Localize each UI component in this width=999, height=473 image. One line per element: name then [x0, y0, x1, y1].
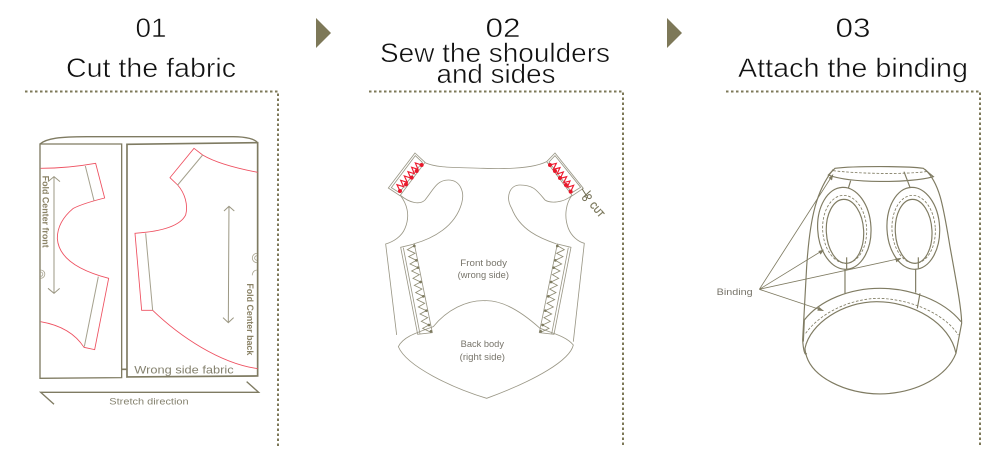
- fold marks: [41, 253, 257, 278]
- side seams: [845, 269, 916, 293]
- back fabric piece: [122, 143, 258, 377]
- panel border: step 3: [726, 92, 980, 447]
- hem binding: [803, 288, 961, 394]
- label: wrong side fabric: Wrong side fabric: [134, 364, 234, 376]
- label: fold center back: Fold Center back: [245, 283, 255, 356]
- shoulder seam: right: [547, 153, 583, 196]
- side seam: right: [539, 244, 571, 334]
- panel border: step 1: [25, 92, 278, 447]
- panel border: step 2: [369, 92, 623, 447]
- right armhole binding: [885, 186, 942, 271]
- label: stretch direction: Stretch direction: [109, 396, 189, 406]
- callout arrows to binding: [759, 174, 901, 311]
- seam allowance lines: [84, 155, 203, 347]
- arrow: step 2 to step 3: [667, 18, 682, 48]
- step 1 heading: Cut the fabric: [66, 53, 236, 83]
- label: fold center front: Fold Center front: [40, 176, 50, 248]
- step 3 number: 03: [836, 13, 870, 43]
- label: back body: Back body: [461, 339, 505, 349]
- label: cut: CUT: [587, 200, 606, 220]
- shoulder seam: left: [388, 153, 425, 196]
- step 2 heading: and sides: [436, 59, 556, 89]
- arrow: step 1 to step 2: [316, 18, 331, 48]
- step 2 number: 02: [486, 13, 520, 43]
- front fabric piece: [40, 144, 122, 378]
- panel: cutting pattern diagram: [40, 137, 259, 406]
- side seam: left: [401, 244, 432, 334]
- left armhole binding: [816, 186, 873, 271]
- fabric fold top curve: [40, 137, 258, 144]
- front pattern outline: [41, 163, 109, 350]
- step 3 heading: Attach the binding: [738, 53, 968, 83]
- garment body outline: [803, 169, 962, 354]
- label: front body: Front body: [460, 258, 508, 268]
- label: front body: (wrong side): [458, 270, 509, 280]
- panel: binding diagram: [717, 167, 962, 394]
- step 1 number: 01: [136, 13, 166, 43]
- back pattern outline: [135, 148, 258, 369]
- label: binding: Binding: [717, 287, 753, 297]
- back body outline: [398, 301, 573, 398]
- icon: scissors: [582, 189, 591, 201]
- panel: sewing shoulders and sides diagram: [386, 153, 606, 398]
- neck binding: [828, 167, 933, 188]
- grain arrow: front: [48, 177, 60, 293]
- step 2 heading: Sew the shoulders: [380, 38, 610, 68]
- stretch direction bracket: [41, 382, 259, 404]
- garment outline: [386, 162, 584, 342]
- grain arrow: back: [223, 206, 234, 323]
- label: back body: (right side): [460, 352, 505, 362]
